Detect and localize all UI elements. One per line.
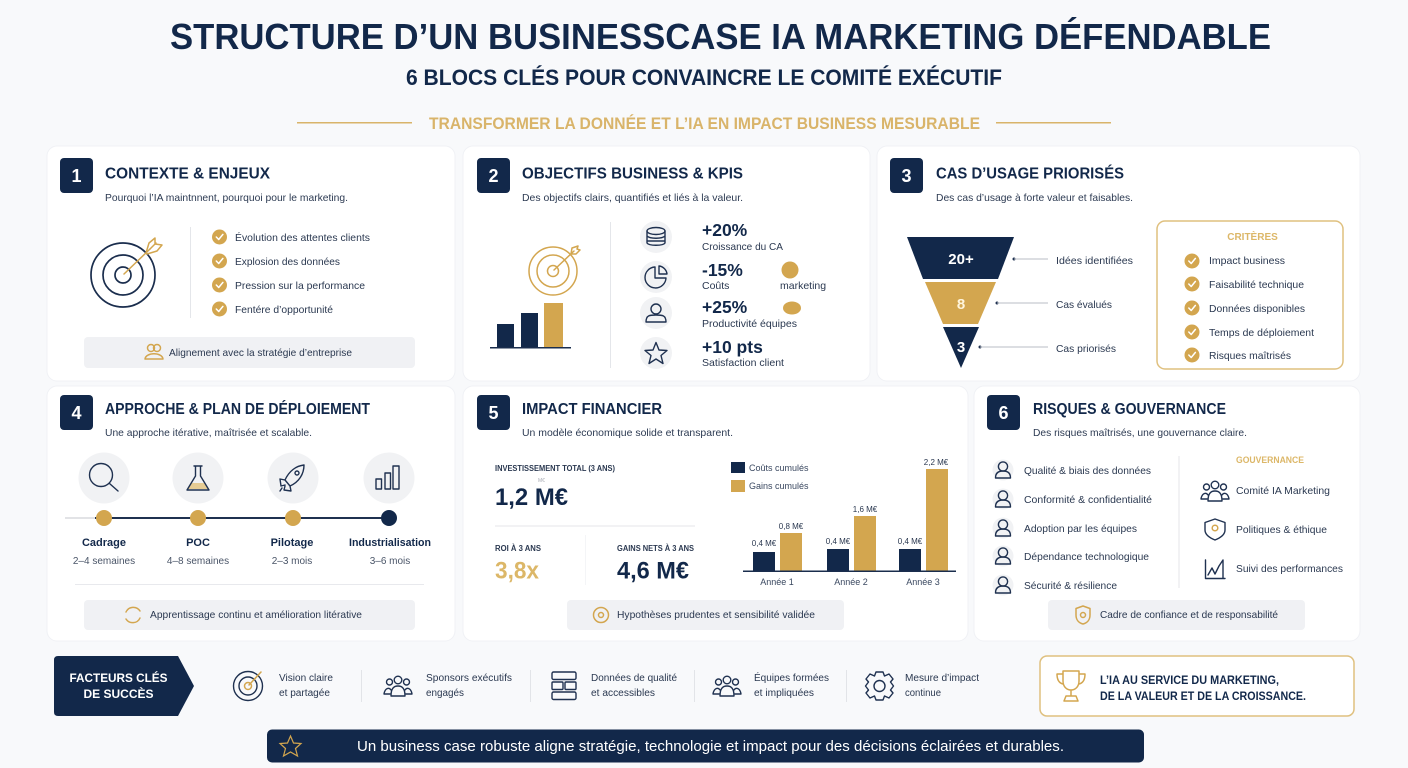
metric: gains nets: GAINS NETS À 3 ANS (617, 544, 695, 553)
chart: funnel: 8 (957, 296, 965, 313)
callout: hypotheses (567, 600, 844, 630)
step: pilotage (268, 452, 318, 567)
callout: hypotheses: Hypothèses prudentes et sensibilité validée (617, 609, 815, 621)
subtitle: 6 BLOCS CLÉS POUR CONVAINCRE LE COMITÉ EXÉCUTIF (406, 65, 1002, 90)
badge 4 (60, 395, 93, 430)
criteria box: Impact business (1209, 255, 1285, 267)
heading 4: APPROCHE & PLAN DE DÉPLOIEMENT (105, 399, 370, 418)
governance list (1201, 455, 1343, 578)
panel: approche et plan (47, 386, 455, 641)
kpi: productivite: +25% (702, 297, 748, 317)
title: STRUCTURE D’UN BUSINESSCASE IA MARKETING DÉFENDABLE (170, 16, 1271, 57)
callout: apprentissage (84, 600, 415, 630)
badge 3 (890, 158, 923, 193)
metric: ROI: ROI À 3 ANS (495, 544, 542, 553)
badge 2: 2 (488, 166, 499, 186)
kpi: couts: -15% (702, 260, 743, 280)
description 1: Pourquoi l’IA maintnnent, pourquoi pour le marketing. (105, 192, 348, 204)
checklist: Pression sur la performance (235, 280, 365, 292)
step: cadrage (73, 452, 135, 567)
funnel labels: Cas évalués (1056, 299, 1112, 311)
metric: investissement: M€ (538, 478, 545, 484)
bar chart: couts et gains (743, 458, 956, 587)
metric: gains nets: 4,6 M€ (617, 558, 689, 584)
kpi: couts: marketing (780, 280, 826, 292)
badge 6: 6 (998, 403, 1009, 423)
kpi: croissance: +20% (702, 220, 748, 240)
closing statement box (1040, 656, 1354, 716)
icon: gold target (529, 246, 580, 295)
success factors arrow: DE SUCCÈS (83, 686, 154, 701)
step: cadrage: 2–4 semaines (73, 556, 135, 567)
metric: investissement: INVESTISSEMENT TOTAL (3 ANS) (495, 464, 615, 473)
factor: mesure: Mesure d’impact (905, 673, 979, 684)
funnel labels: Idées identifiées (1056, 255, 1133, 267)
step: industrialisation: Industrialisation (349, 537, 431, 549)
success factors arrow (54, 656, 194, 716)
risk list: Sécurité & résilience (1024, 580, 1117, 592)
panel: objectifs business et KPIs (463, 146, 870, 381)
badge 5: 5 (488, 403, 499, 423)
funnel labels (978, 255, 1133, 355)
step: cadrage: Cadrage (82, 537, 126, 549)
criteria box: Temps de déploiement (1209, 327, 1314, 339)
metric: investissement (495, 464, 615, 511)
criteria box (1157, 221, 1343, 369)
kpi: couts (640, 260, 826, 293)
description 5: Un modèle économique solide et transparent. (522, 427, 733, 439)
badge 5 (477, 395, 510, 430)
kpi: croissance: Croissance du CA (702, 241, 783, 253)
step: industrialisation (349, 452, 431, 567)
timeline (65, 452, 431, 567)
factor: donnees: Données de qualité (591, 673, 677, 684)
bar chart: couts et gains: 0,4 M€ (826, 537, 851, 546)
bar chart: couts et gains: Année 1 (760, 577, 794, 587)
tagline with rules: TRANSFORMER LA DONNÉE ET L’IA EN IMPACT BUSINESS MESURABLE (429, 114, 980, 133)
chart: growth bars (490, 303, 571, 348)
factor: vision: et partagée (279, 688, 330, 699)
panel: impact financier (463, 386, 968, 641)
factor: donnees: et accessibles (591, 688, 655, 699)
step: industrialisation: 3–6 mois (370, 556, 410, 567)
chart legend (731, 462, 809, 492)
badge 1: 1 (71, 166, 82, 186)
description 3: Des cas d’usage à forte valeur et faisables. (936, 192, 1133, 204)
chart legend: Coûts cumulés (749, 463, 809, 473)
callout: alignement (84, 337, 415, 368)
metric: ROI (495, 544, 542, 584)
description 4: Une approche itérative, maîtrisée et scalable. (105, 427, 312, 439)
kpi: satisfaction: +10 pts (702, 337, 763, 357)
heading 6: RISQUES & GOUVERNANCE (1033, 401, 1226, 418)
callout: cadre de confiance (1048, 600, 1305, 630)
badge 1 (60, 158, 93, 193)
factor: sponsors (384, 673, 512, 699)
kpi: satisfaction: Satisfaction client (702, 357, 784, 369)
factor: equipes: Équipes formées (754, 671, 829, 684)
closing statement box: DE LA VALEUR ET DE LA CROISSANCE. (1100, 689, 1306, 703)
step: pilotage: Pilotage (271, 537, 313, 549)
callout: apprentissage: Apprentissage continu et amélioration litérative (150, 609, 362, 621)
kpi: satisfaction (640, 337, 784, 369)
closing statement box: L’IA AU SERVICE DU MARKETING, (1100, 673, 1279, 687)
criteria box: Données disponibles (1209, 303, 1305, 315)
criteria box: Faisabilité technique (1209, 279, 1304, 291)
panel: cas d'usage (877, 146, 1360, 381)
checklist: Explosion des données (235, 256, 340, 268)
badge 3: 3 (901, 166, 912, 186)
step: POC: POC (186, 537, 210, 549)
badge 6 (987, 395, 1020, 430)
panel: contexte et enjeux (47, 146, 455, 381)
bar chart: couts et gains: 0,8 M€ (779, 522, 804, 531)
callout: alignement: Alignement avec la stratégie d’entreprise (169, 347, 352, 359)
factor: equipes (713, 671, 829, 699)
description 6: Des risques maîtrisés, une gouvernance claire. (1033, 427, 1247, 439)
bar chart: couts et gains: 1,6 M€ (853, 505, 878, 514)
factor: sponsors: engagés (426, 688, 464, 699)
governance list: Politiques & éthique (1236, 524, 1327, 536)
criteria box: Risques maîtrisés (1209, 350, 1291, 362)
factor: equipes: et impliquées (754, 688, 814, 699)
metric: ROI: 3,8x (495, 558, 540, 584)
factor: mesure: continue (905, 688, 941, 699)
step: POC: 4–8 semaines (167, 556, 229, 567)
risk list (992, 460, 1152, 596)
icon: target and arrow (91, 238, 162, 307)
factor: mesure (866, 672, 979, 700)
step: POC (167, 452, 229, 567)
badge 4: 4 (71, 403, 82, 423)
checklist: Évolution des attentes clients (235, 231, 370, 244)
factor: sponsors: Sponsors exécutifs (426, 673, 512, 684)
bar chart: couts et gains: 0,4 M€ (752, 539, 777, 548)
bar chart: couts et gains: Année 3 (906, 577, 940, 587)
metric: gains nets (617, 544, 695, 584)
factor: vision: Vision claire (279, 673, 333, 684)
bottom banner: Un business case robuste aligne stratégie, technologie et impact pour des décisions éclairées et durables. (357, 738, 1064, 755)
kpi: productivite (640, 297, 801, 330)
heading 5: IMPACT FINANCIER (522, 401, 662, 418)
risk list: Conformité & confidentialité (1024, 494, 1152, 506)
heading 1: CONTEXTE & ENJEUX (105, 166, 270, 182)
kpi: croissance (640, 220, 783, 253)
governance list: Suivi des performances (1236, 563, 1343, 575)
risk list: Dépendance technologique (1024, 551, 1149, 563)
funnel labels: Cas priorisés (1056, 343, 1116, 355)
chart: funnel (907, 237, 1014, 368)
badge 2 (477, 158, 510, 193)
heading 2: OBJECTIFS BUSINESS & KPIS (522, 166, 743, 182)
chart: funnel: 20+ (948, 251, 974, 268)
checklist (212, 230, 370, 316)
criteria box: CRITÈRES (1227, 230, 1278, 243)
heading 3: CAS D’USAGE PRIORISÉS (936, 164, 1124, 182)
factor: vision (234, 672, 333, 700)
risk list: Qualité & biais des données (1024, 465, 1151, 477)
checklist: Fentére d’opportunité (235, 304, 333, 316)
bar chart: couts et gains: Année 2 (834, 577, 868, 587)
success factors arrow: FACTEURS CLÉS (70, 670, 168, 685)
chart: funnel: 3 (957, 339, 965, 356)
kpi: couts: Coûts (702, 280, 729, 292)
description 2: Des objectifs clairs, quantifiés et liés à la valeur. (522, 192, 743, 204)
governance list: GOUVERNANCE (1236, 455, 1304, 465)
bar chart: couts et gains: 0,4 M€ (898, 537, 923, 546)
chart legend: Gains cumulés (749, 481, 809, 491)
step: pilotage: 2–3 mois (272, 556, 312, 567)
callout: cadre de confiance: Cadre de confiance et de responsabilité (1100, 609, 1278, 621)
governance list: Comité IA Marketing (1236, 485, 1330, 497)
bottom banner (267, 730, 1144, 762)
kpi: productivite: Productivité équipes (702, 318, 797, 330)
metric: investissement: 1,2 M€ (495, 484, 568, 511)
risk list: Adoption par les équipes (1024, 523, 1137, 535)
bar chart: couts et gains: 2,2 M€ (924, 458, 949, 467)
factor: donnees (552, 672, 677, 700)
panel: risques et gouvernance (974, 386, 1360, 641)
